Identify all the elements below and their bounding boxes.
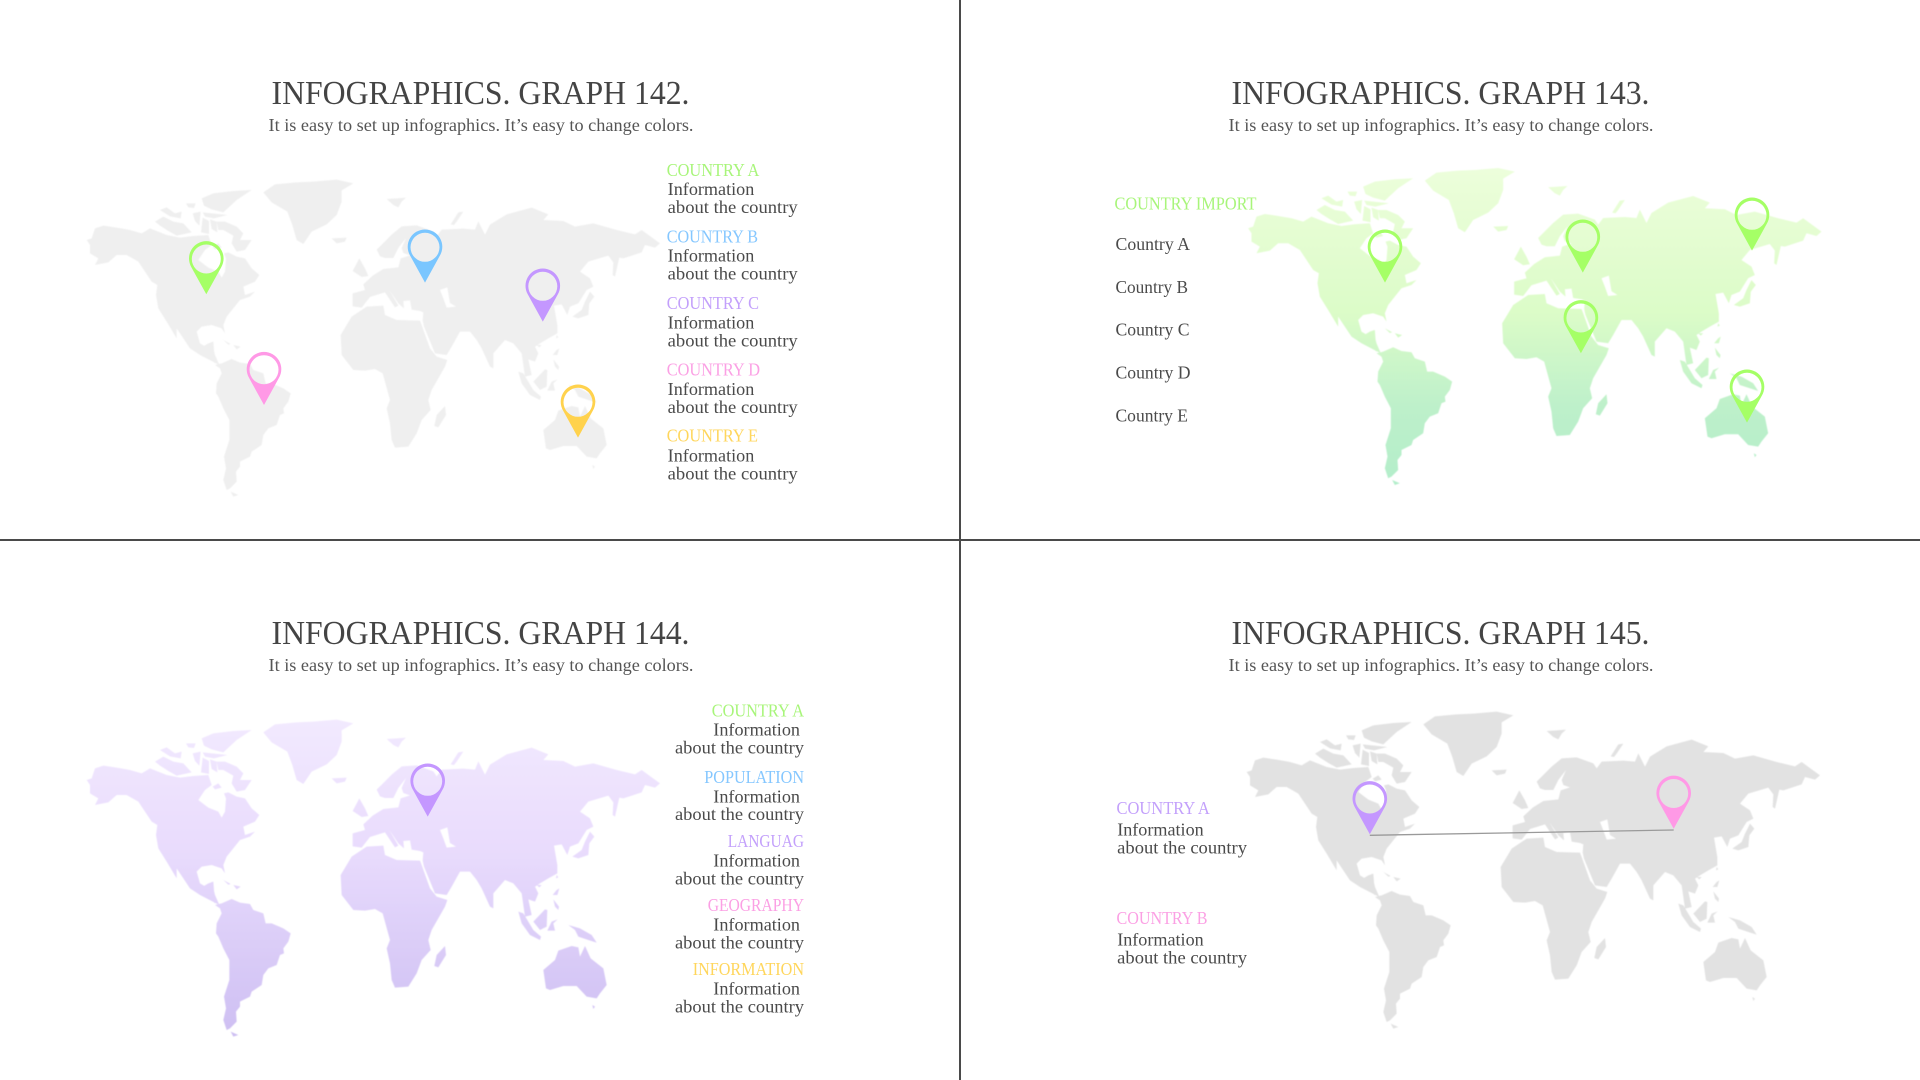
title: graph 143: INFOGRAPHICS. GRAPH 143. — [1232, 75, 1650, 112]
panel: graph 143 — [1114, 75, 1842, 508]
legend item: country B: Information — [1117, 929, 1204, 949]
legend item: information: about the country — [675, 996, 804, 1016]
legend item: population: POPULATION — [704, 767, 804, 787]
subtitle: graph 145: It is easy to set up infographics. It’s easy to change colors. — [1228, 655, 1654, 675]
world map: darker grey — [1247, 712, 1820, 1028]
legend item: country E: COUNTRY E — [667, 426, 758, 446]
legend item: geography: GEOGRAPHY — [708, 895, 804, 915]
pin: country B — [1656, 776, 1691, 829]
legend item: country E: Information — [668, 446, 754, 466]
legend item: population — [675, 767, 804, 824]
connector line between pins — [1370, 830, 1674, 835]
title: graph 142: INFOGRAPHICS. GRAPH 142. — [272, 75, 690, 112]
pin: pink — [247, 352, 281, 405]
legend item: country B — [1116, 908, 1247, 967]
legend item: country A — [667, 160, 798, 217]
legend item: country A: about the country — [1117, 837, 1247, 857]
pin: country A — [1352, 781, 1387, 834]
legend item: information: INFORMATION — [693, 959, 804, 979]
pin: country B — [1566, 219, 1600, 273]
legend item: information — [675, 959, 804, 1016]
legend item: information: Information — [713, 979, 800, 999]
legend item: country B: about the country — [668, 264, 798, 284]
legend item: country A — [1116, 798, 1247, 857]
legend item: country A: Information — [668, 179, 754, 199]
legend: countries — [667, 160, 798, 484]
legend item: country A: about the country — [675, 737, 804, 757]
list items: Country A — [1116, 234, 1190, 254]
panel: graph 144 — [70, 615, 804, 1060]
legend item: country D — [667, 359, 798, 417]
pin: country C — [1564, 300, 1598, 353]
list items — [1116, 234, 1191, 426]
legend item: country B — [667, 227, 798, 284]
panel: graph 142 — [70, 75, 798, 520]
legend item: geography: Information — [713, 915, 800, 935]
list heading: COUNTRY IMPORT — [1114, 193, 1256, 213]
title: graph 144: INFOGRAPHICS. GRAPH 144. — [272, 615, 690, 652]
subtitle: graph 142: It is easy to set up infographics. It’s easy to change colors. — [268, 115, 694, 135]
world map: green gradient — [1248, 168, 1822, 486]
list items: Country B — [1116, 277, 1188, 297]
list items: Country D — [1116, 363, 1191, 383]
legend item: geography — [675, 895, 804, 952]
pin: country E — [1730, 369, 1764, 423]
legend item: country A: COUNTRY A — [1116, 798, 1210, 818]
subtitle: graph 143: It is easy to set up infographics. It’s easy to change colors. — [1228, 115, 1654, 135]
list: country import — [1114, 193, 1256, 426]
legend item: country B: about the country — [1117, 947, 1247, 967]
panel: graph 145 — [1116, 615, 1840, 1052]
legend item: country C: COUNTRY C — [667, 293, 759, 313]
legend item: country A: Information — [1117, 819, 1204, 839]
legend item: country D: about the country — [668, 397, 798, 417]
title: graph 145: INFOGRAPHICS. GRAPH 145. — [1232, 615, 1650, 652]
legend item: population: about the country — [675, 804, 804, 824]
legend item: country B: COUNTRY B — [667, 227, 758, 247]
legend: topics — [675, 701, 804, 1016]
pin: purple — [410, 763, 445, 817]
legend item: country B: Information — [668, 246, 754, 266]
legend item: country D: Information — [668, 379, 754, 399]
legend item: country A: COUNTRY A — [667, 160, 759, 180]
world map: purple gradient — [87, 720, 660, 1037]
pin: country A — [1368, 229, 1402, 283]
legend item: language: LANGUAG — [728, 831, 804, 851]
pin: yellow — [561, 384, 595, 438]
legend item: country C: about the country — [668, 330, 798, 350]
list items: Country C — [1116, 320, 1190, 340]
legend item: country A: about the country — [668, 197, 798, 217]
pin: purple — [526, 268, 560, 322]
pin: country D — [1735, 197, 1769, 251]
legend item: country E: about the country — [668, 464, 798, 484]
legend item: geography: about the country — [675, 932, 804, 952]
legend item: country C — [667, 293, 798, 350]
legend item: country A: COUNTRY A — [712, 701, 804, 721]
legend item: language — [675, 831, 804, 888]
legend item: language: about the country — [675, 868, 804, 888]
list items: Country E — [1116, 406, 1188, 426]
legend item: language: Information — [713, 851, 800, 871]
legend item: country E — [667, 426, 798, 484]
pin: blue — [408, 229, 442, 283]
legend item: country C: Information — [668, 312, 754, 332]
legend item: population: Information — [713, 786, 800, 806]
subtitle: graph 144: It is easy to set up infographics. It’s easy to change colors. — [268, 655, 694, 675]
legend item: country A — [675, 701, 804, 757]
legend item: country B: COUNTRY B — [1116, 908, 1208, 928]
legend item: country D: COUNTRY D — [667, 359, 760, 379]
world map: grey — [88, 180, 660, 496]
legend item: country A: Information — [713, 720, 800, 740]
pin: green — [189, 241, 224, 294]
